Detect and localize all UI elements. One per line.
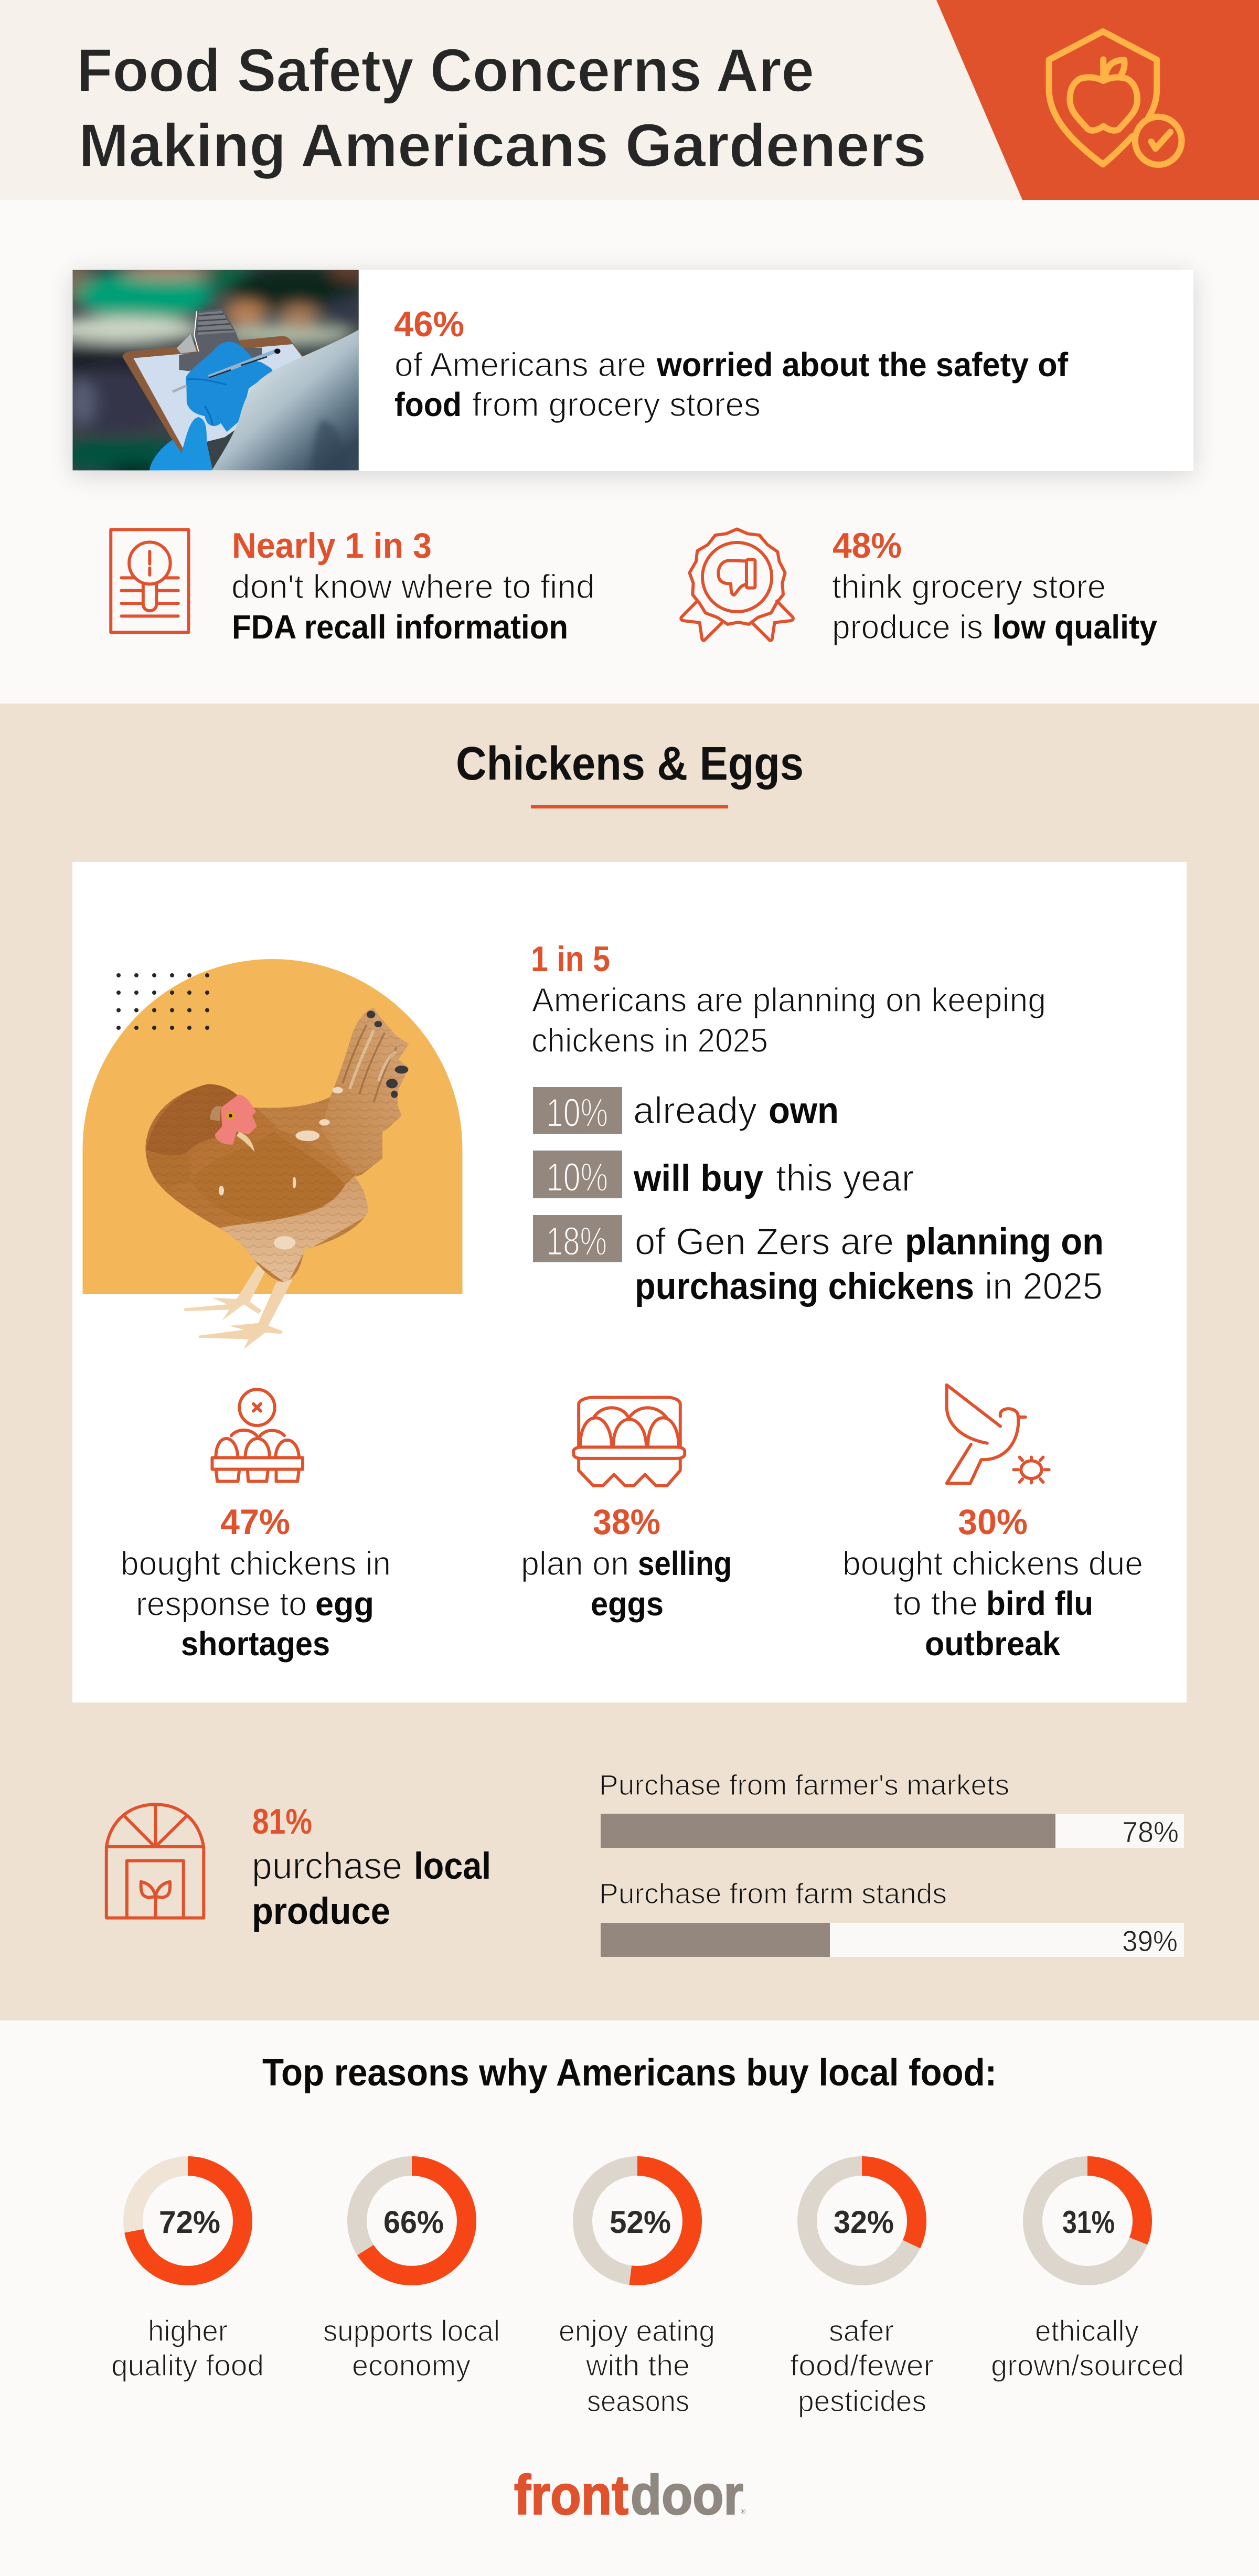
bar chart: farmer's markets 78% bbox=[599, 1769, 1184, 1848]
stat: 30% bird flu: to the bbox=[893, 1584, 978, 1622]
stat text: 46% bbox=[394, 304, 1069, 423]
stat text: 48% bbox=[833, 526, 902, 566]
logo: frontdoor: front bbox=[514, 2464, 628, 2526]
stat text: 46%: food bbox=[394, 386, 462, 423]
donut: 31% ethically grown: ethically bbox=[1035, 2314, 1139, 2348]
stat: 47% egg shortages: egg bbox=[315, 1585, 374, 1623]
arch background bbox=[83, 959, 463, 1294]
stat row: 18% gen z: of Gen Zers are bbox=[635, 1221, 894, 1263]
stat row: 18% gen z bbox=[533, 1215, 1104, 1307]
bar chart: farmer's markets 78%: Purchase from farmer's markets bbox=[599, 1769, 1009, 1801]
bar chart: farm stands 39% bbox=[599, 1877, 1184, 1957]
stat text: 46%: of Americans are bbox=[394, 346, 646, 384]
header orange panel bbox=[936, 0, 1259, 200]
stat row: 10% already own bbox=[533, 1087, 839, 1135]
bar chart: farm stands 39%: Purchase from farm stands bbox=[599, 1877, 947, 1910]
coat bbox=[212, 329, 359, 471]
stat row: 18% gen z: 18% bbox=[546, 1219, 607, 1264]
card background bbox=[72, 270, 1193, 471]
donut: 32% safer food: food/fewer bbox=[790, 2349, 934, 2382]
stat: 81% purchase local produce: produce bbox=[252, 1891, 390, 1932]
card shadow bbox=[72, 274, 1193, 475]
stat row: 10% will buy bbox=[533, 1151, 914, 1200]
heading: Chickens & Eggs bbox=[456, 738, 804, 790]
donut: 32% safer food: 32% bbox=[834, 2205, 894, 2240]
donut: 72% higher quality food: higher bbox=[148, 2314, 228, 2348]
stat text: don't know where to find bbox=[231, 568, 595, 605]
stat text: produce is bbox=[832, 608, 983, 646]
photo: brown hen bbox=[143, 1003, 412, 1349]
stat text: 46%: worried about the safety of bbox=[656, 346, 1069, 384]
text: 1 in 5 keeping chickens bbox=[531, 939, 1046, 1059]
donut: 32% safer food: pesticides bbox=[798, 2385, 926, 2418]
donut: 31% ethically grown: grown/sourced bbox=[991, 2349, 1184, 2382]
panel: chickens and eggs section bbox=[0, 704, 1259, 2020]
photo: gloved hand writing on clipboard bbox=[72, 270, 359, 471]
text: 1 in 5 keeping chickens: chickens in 2025 bbox=[531, 1021, 768, 1059]
heading: top reasons: Top reasons why Americans buy local food: bbox=[262, 2052, 997, 2094]
panel: 48% low quality stat bbox=[681, 526, 1157, 646]
stat row: 18% gen z: purchasing chickens bbox=[635, 1266, 974, 1307]
stat text: 46%: from grocery stores bbox=[472, 386, 761, 423]
icon: document with magnifier alert bbox=[111, 529, 188, 632]
heading underline bbox=[531, 805, 728, 808]
stat: 30% bird flu: outbreak bbox=[925, 1625, 1060, 1663]
donut: 72% higher quality food: quality food bbox=[111, 2349, 264, 2382]
donut: 66% supports local economy bbox=[323, 2166, 500, 2382]
title bbox=[77, 36, 926, 179]
stat text bbox=[231, 526, 595, 646]
stat row: 10% will buy: this year bbox=[776, 1158, 914, 1199]
donut: 52% enjoy eating with the seasons: seasons bbox=[587, 2385, 689, 2418]
donut: 66% supports local economy: economy bbox=[352, 2349, 471, 2382]
panel: white chicken card bbox=[72, 862, 1187, 1702]
stat text: FDA recall information bbox=[232, 608, 568, 646]
bar chart: farmer's markets 78%: 78% bbox=[1122, 1815, 1179, 1848]
stat: 30% bird flu bbox=[842, 1385, 1143, 1663]
stat row: 10% will buy: 10% bbox=[546, 1155, 608, 1200]
donut: 52% enjoy eating with the seasons bbox=[559, 2166, 715, 2418]
stat: 30% bird flu: 30% bbox=[958, 1502, 1028, 1542]
logo: frontdoor bbox=[514, 2464, 746, 2526]
icon: greenhouse with sprout bbox=[106, 1804, 204, 1918]
stat text: Nearly 1 in 3 bbox=[232, 526, 432, 566]
title: Food Safety Concerns Are bbox=[77, 36, 814, 104]
donut: 31% ethically grown bbox=[991, 2166, 1184, 2382]
stat: 81% purchase local produce: local bbox=[414, 1846, 491, 1887]
stat: 81% purchase local produce bbox=[106, 1802, 491, 1932]
stat row: 10% already own: own bbox=[769, 1090, 839, 1132]
donut: 72% higher quality food bbox=[111, 2166, 264, 2382]
donut: 66% supports local economy: 66% bbox=[383, 2205, 444, 2240]
clipboard bbox=[122, 336, 304, 453]
stat: 47% egg shortages: response to bbox=[136, 1585, 307, 1623]
stat: 38% selling eggs: eggs bbox=[591, 1585, 664, 1623]
header banner bbox=[0, 0, 1259, 200]
logo: frontdoor: door bbox=[631, 2464, 743, 2526]
donut: 32% safer food: safer bbox=[829, 2314, 894, 2348]
stat: 38% selling eggs: 38% bbox=[593, 1502, 660, 1542]
stat: 81% purchase local produce: 81% bbox=[252, 1802, 312, 1841]
text: 1 in 5 keeping chickens: Americans are planning on keeping bbox=[532, 981, 1046, 1019]
stat: 30% bird flu: bought chickens due bbox=[842, 1545, 1143, 1582]
stat: 38% selling eggs: plan on bbox=[521, 1545, 629, 1582]
stat: 47% egg shortages: bought chickens in bbox=[121, 1545, 391, 1582]
donut: 66% supports local economy: supports local bbox=[323, 2314, 500, 2348]
donut: 52% enjoy eating with the seasons: with the bbox=[585, 2349, 690, 2382]
stat: 30% bird flu: bird flu bbox=[986, 1584, 1093, 1622]
stat: 38% selling eggs: selling bbox=[638, 1545, 732, 1582]
stat row: 10% will buy: will buy bbox=[633, 1158, 763, 1199]
pen bbox=[173, 386, 187, 392]
logo: frontdoor: ® bbox=[741, 2507, 746, 2515]
stat text: think grocery store bbox=[832, 568, 1106, 605]
stat text: low quality bbox=[993, 608, 1157, 646]
donut: 31% ethically grown: 31% bbox=[1062, 2205, 1115, 2240]
stat row: 10% already own: already bbox=[633, 1090, 757, 1132]
stat row: 10% already own: 10% bbox=[546, 1091, 608, 1135]
donut: 52% enjoy eating with the seasons: enjoy eating bbox=[559, 2314, 715, 2348]
donut: 32% safer food bbox=[790, 2166, 934, 2418]
icon: ribbon badge with thumbs down bbox=[681, 529, 793, 641]
clip bbox=[179, 308, 262, 371]
stat: 47% egg shortages: shortages bbox=[181, 1625, 330, 1663]
stat text bbox=[832, 526, 1157, 646]
stat: 47% egg shortages bbox=[121, 1389, 391, 1663]
panel: nearly 1 in 3 stat bbox=[111, 526, 595, 646]
icon: shield with apple and check bbox=[1049, 31, 1181, 165]
stat: 47% egg shortages: 47% bbox=[220, 1502, 290, 1542]
stat row: 18% gen z: in 2025 bbox=[985, 1266, 1103, 1307]
icon: egg carton bbox=[573, 1398, 685, 1486]
stat: 81% purchase local produce: purchase bbox=[252, 1846, 402, 1887]
icon: egg tray with x circle bbox=[212, 1389, 303, 1481]
stat text: 46%: 46% bbox=[394, 304, 464, 344]
dot grid bbox=[116, 973, 209, 1030]
bar chart: farm stands 39%: 39% bbox=[1122, 1924, 1178, 1957]
icon: bird with virus bbox=[947, 1385, 1049, 1483]
text: 1 in 5 keeping chickens: 1 in 5 bbox=[531, 939, 610, 979]
stat row: 18% gen z: planning on bbox=[905, 1221, 1104, 1263]
donut: 52% enjoy eating with the seasons: 52% bbox=[610, 2205, 671, 2240]
donut: 72% higher quality food: 72% bbox=[159, 2205, 220, 2240]
panel: 46% worried card bbox=[42, 261, 1193, 477]
title: Making Americans Gardeners bbox=[79, 111, 926, 179]
stat: 38% selling eggs bbox=[521, 1398, 732, 1623]
glove bbox=[186, 342, 273, 432]
